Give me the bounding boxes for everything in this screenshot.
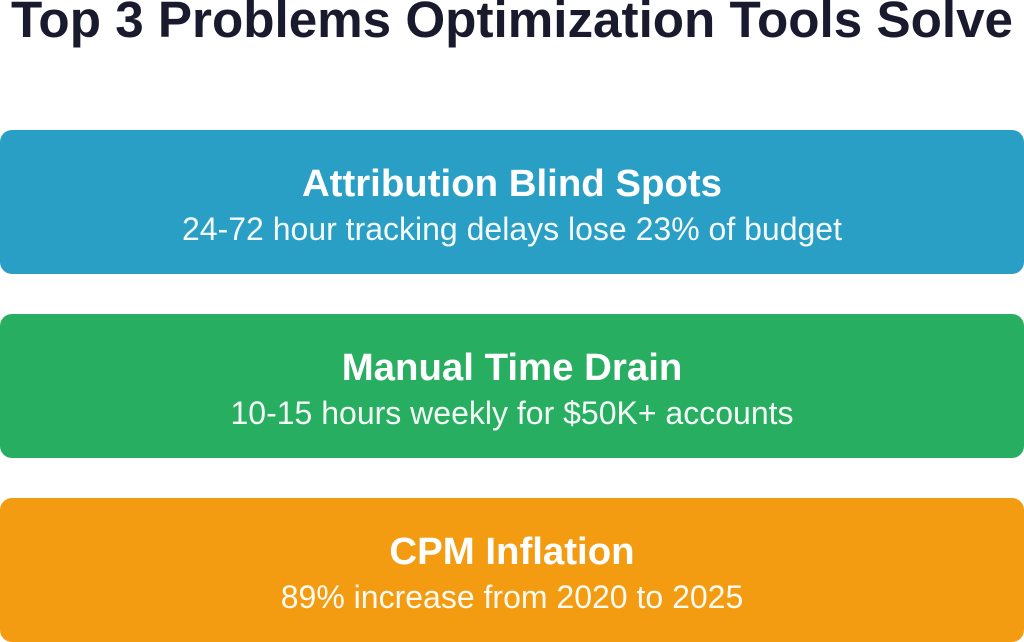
text: increase: 89% increase from 2020 to 2025: [281, 579, 743, 615]
heading: Manual Time Drain: Manual Time Drain: [342, 346, 682, 389]
panel: Attribution Blind Spots: [0, 130, 1024, 274]
text: tracking delays: 24-72 hour tracking delays lose 23% of budget: [182, 211, 842, 247]
panel: Manual Time Drain: [0, 314, 1024, 458]
heading: Attribution Blind Spots: Attribution Blind Spots: [302, 162, 722, 205]
panel: CPM Inflation: [0, 498, 1024, 642]
text: hours weekly: 10-15 hours weekly for $50K+ accounts: [230, 395, 794, 431]
heading: CPM Inflation: CPM Inflation: [389, 530, 635, 573]
